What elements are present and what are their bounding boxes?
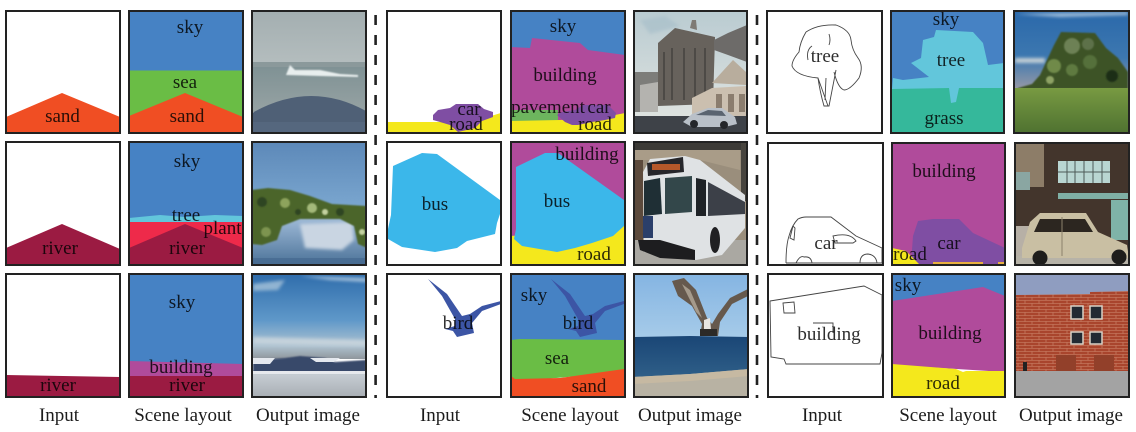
scene layout panel: sky tree grass: grass [924,108,964,129]
input panel: river hump: river [42,238,79,259]
input panel: river strip [6,274,120,397]
input panel: sand [6,11,120,133]
input panel: bird: bird [443,313,474,334]
scene layout panel: sky building river [129,274,243,397]
output image: tree on grass [1013,10,1130,134]
scene layout panel: building bus road [511,142,625,265]
scene layout panel: sky tree grass [891,9,1004,133]
input panel: building sketch [768,274,883,397]
caption: middle scene layout: Scene layout [521,405,620,426]
input panel: river strip: river [40,375,77,396]
scene layout panel: sky sea sand [129,11,243,134]
input panel: sand: sand [45,106,80,127]
divider: right [756,10,758,398]
caption: middle input: Input [420,405,461,426]
scene layout panel: sky building river: building [149,357,213,378]
input panel: bird [387,274,501,397]
input panel: tree sketch [767,11,882,133]
output image: bus [633,141,748,266]
scene layout panel: sky building road: road [926,373,960,394]
scene layout panel: sky bird sea sand: sand [572,376,607,397]
caption: right input: Input [802,405,843,426]
scene layout panel: sky tree plant river: sky [174,151,201,172]
scene layout panel: sky tree plant river: plant [204,218,242,239]
scene layout panel: sky building pavement car road [511,11,625,135]
scene layout panel: sky building road: building [918,323,982,344]
scene layout panel: sky tree plant river: river [169,238,206,259]
output image: beige car by wooden house [1014,142,1130,266]
scene layout panel: sky bird sea sand: sky [521,285,548,306]
scene layout panel: sky tree grass: tree [937,50,965,71]
scene layout panel: sky building pavement car road: car [587,97,611,118]
scene layout panel: building car road: building [912,161,976,182]
scene layout panel: sky tree plant river [129,142,243,265]
scene layout panel: sky sea sand: sand [170,106,205,127]
output image: eagle over beach [633,273,749,398]
input panel: building sketch: building [797,324,861,345]
input panel: river hump [6,142,120,265]
scene layout panel: building car road [892,143,1005,265]
caption: middle output image: Output image [638,405,742,426]
scene layout panel: sky bird sea sand [511,274,625,397]
scene layout panel: sky sea sand: sky [177,17,204,38]
scene layout panel: sky sea sand: sea [173,72,198,93]
scene layout panel: sky bird sea sand: bird [563,313,594,334]
scene layout panel: building bus road: building [555,144,619,165]
scene layout panel: sky building pavement car road: sky [550,16,577,37]
scene layout panel: sky building river: sky [169,292,196,313]
scene layout panel: building car road: car [937,233,961,254]
output image: brick building [1014,273,1130,398]
caption: left input: Input [39,405,80,426]
input panel: car sketch [768,143,883,265]
scene layout panel: sky building road: sky [895,275,922,296]
scene layout panel: sky tree grass: sky [933,9,960,30]
scene layout panel: sky building pavement car road: road [578,114,612,135]
output image: sea with wave [251,10,367,134]
scene layout panel: building bus road: bus [544,191,570,212]
scene layout panel: sky building river: river [169,375,206,396]
input panel: bus [387,142,501,265]
scene layout panel: sky building road [892,274,1005,397]
output image: street with building and car [633,10,748,134]
output image: blue sky over distant buildings [251,273,367,398]
caption: left output image: Output image [256,405,360,426]
input panel: car on road: car [457,99,481,120]
scene layout panel: sky tree plant river: tree [172,205,200,226]
scene layout panel: sky building pavement car road: building [533,65,597,86]
scene layout panel: building bus road: road [577,244,611,265]
caption: right output image: Output image [1019,405,1123,426]
input panel: car sketch: car [814,233,838,254]
input panel: tree sketch: tree [811,46,839,67]
scene layout panel: sky bird sea sand: sea [545,348,570,369]
input panel: car on road: road [449,114,483,135]
scene layout panel: sky building pavement car road: pavement [511,97,586,118]
output image: trees over water [251,141,367,266]
input panel: car on road [387,11,501,135]
divider: left [374,10,377,398]
caption: left scene layout: Scene layout [134,405,233,426]
input panel: bus: bus [422,194,448,215]
scene layout panel: building car road: road [893,244,927,265]
caption: right scene layout: Scene layout [899,405,998,426]
